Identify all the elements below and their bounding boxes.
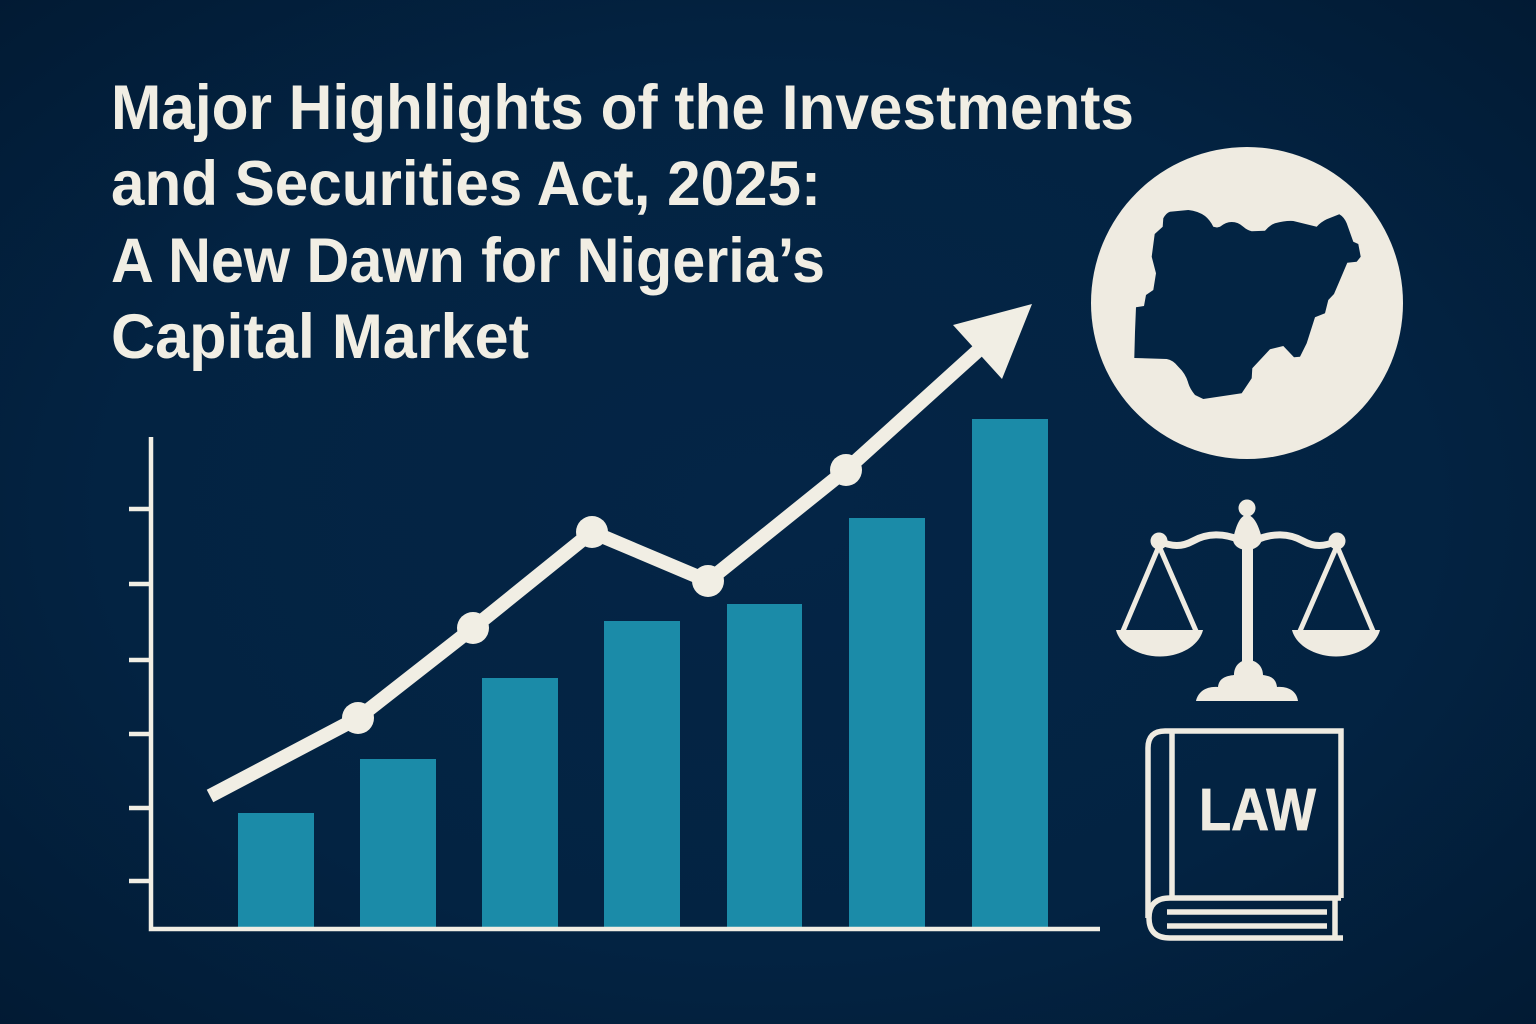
bar chart: [129, 419, 1100, 929]
icon: Nigeria map in circle: [1091, 147, 1403, 459]
data points: [342, 454, 862, 734]
book label: LAW: [1199, 777, 1316, 843]
title: Major Highlights of the Investments: [111, 73, 1134, 143]
bars: [238, 419, 1048, 927]
title: and Securities Act, 2025:: [111, 149, 821, 219]
icon: law book: [1148, 731, 1343, 938]
trend arrow: [210, 304, 1032, 796]
title: A New Dawn for Nigeria’s: [111, 226, 825, 296]
title: Capital Market: [111, 302, 529, 372]
title: [111, 73, 1134, 372]
axes: [129, 437, 1100, 929]
icon: scales of justice: [1116, 500, 1380, 701]
